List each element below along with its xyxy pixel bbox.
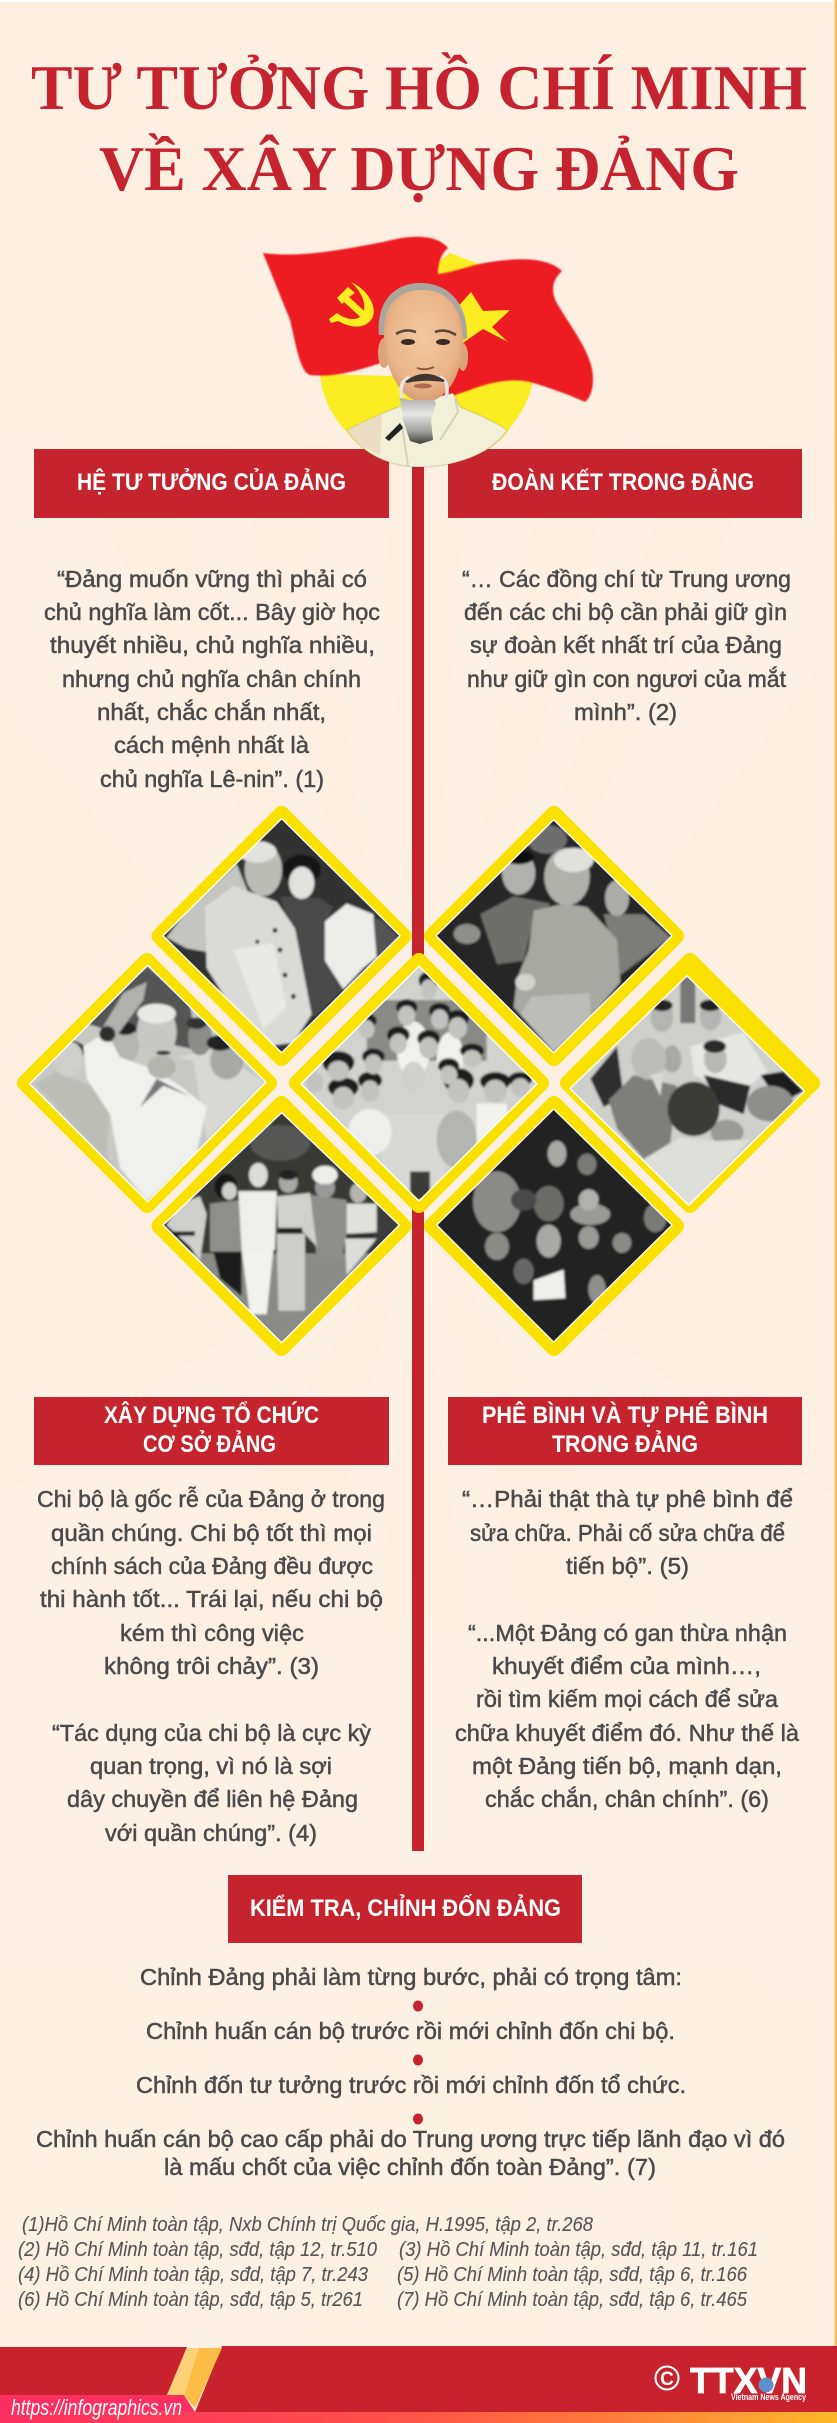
heading: Phê bình và tự phê bình trong Đảng: PHÊ BÌNH VÀ TỰ PHÊ BÌNH	[482, 1401, 768, 1429]
references: (2) Hồ Chí Minh toàn tập, sđd, tập 12, tr.510	[18, 2239, 377, 2261]
logo: TTXVN: Vietnam News Agency	[731, 2392, 806, 2402]
text block: Hệ tư tưởng: chủ nghĩa Lê-nin”. (1)	[100, 766, 324, 792]
text block: Xây dựng tổ chức: dây chuyền để liên hệ Đảng	[67, 1786, 358, 1812]
text block: Kiểm tra, chỉnh đốn: Chỉnh đốn tư tưởng trước rồi mới chỉnh đốn tổ chức.	[136, 2072, 686, 2098]
references: (4) Hồ Chí Minh toàn tập, sđd, tập 7, tr.243	[18, 2264, 368, 2286]
logo: TTXVN: TTXVN	[690, 2360, 807, 2401]
photo: bottom left	[160, 1111, 403, 1346]
text block: Phê bình: một Đảng tiến bộ, mạnh dạn,	[472, 1753, 782, 1779]
photo: middle centre	[300, 964, 540, 1204]
heading: Hệ tư tưởng của Đảng: HỆ TƯ TƯỞNG CỦA ĐẢNG	[77, 467, 346, 496]
photo: bottom right	[434, 1107, 674, 1346]
photo: top right	[434, 818, 674, 1057]
text block: Phê bình: rồi tìm kiếm mọi cách để sửa	[476, 1686, 778, 1712]
references: (1)Hồ Chí Minh toàn tập, Nxb Chính trị Quốc gia, H.1995, tập 2, tr.268	[22, 2214, 593, 2236]
text block: Hệ tư tưởng: nhất, chắc chắn nhất,	[97, 699, 326, 725]
heading: Xây dựng tổ chức cơ sở Đảng	[34, 1397, 389, 1465]
text block: Hệ tư tưởng: thuyết nhiều, chủ nghĩa nhiều,	[50, 632, 375, 658]
text block: Đoàn kết: đến các chi bộ cần phải giữ gìn	[464, 599, 787, 625]
text block: Phê bình: chắc chắn, chân chính”. (6)	[485, 1786, 769, 1812]
icon: star	[455, 292, 510, 345]
heading: Hệ tư tưởng của Đảng	[34, 449, 389, 518]
text block: Đoàn kết	[462, 566, 791, 725]
logo: TTXVN: C	[660, 2369, 674, 2390]
text block: Phê bình: sửa chữa. Phải cố sửa chữa để	[470, 1520, 785, 1546]
text block: Hệ tư tưởng: “Đảng muốn vững thì phải có	[57, 566, 367, 592]
heading: Kiểm tra, chỉnh đốn Đảng: KIỂM TRA, CHỈNH ĐỐN ĐẢNG	[250, 1893, 561, 1922]
url tab: https://infographics.vn	[11, 2395, 182, 2420]
heading: Đoàn kết trong Đảng: ĐOÀN KẾT TRONG ĐẢNG	[492, 467, 754, 496]
text block: Xây dựng tổ chức: “Tác dụng của chi bộ là cực kỳ	[52, 1720, 372, 1746]
references	[18, 2214, 758, 2311]
footer	[0, 2346, 837, 2423]
photo: middle right	[567, 973, 807, 1209]
heading: Xây dựng tổ chức cơ sở Đảng: XÂY DỰNG TỔ CHỨC	[104, 1401, 319, 1429]
text block: Hệ tư tưởng	[44, 566, 380, 792]
heading: Phê bình và tự phê bình trong Đảng	[448, 1397, 802, 1465]
text block: Xây dựng tổ chức: không trôi chảy”. (3)	[104, 1653, 319, 1679]
photo collage	[25, 814, 812, 1348]
central vertical line	[412, 440, 424, 1851]
text block: Hệ tư tưởng: cách mệnh nhất là	[114, 732, 309, 758]
text block: Đoàn kết: “… Các đồng chí từ Trung ương	[462, 566, 791, 592]
text block: Hệ tư tưởng: chủ nghĩa làm cốt... Bây giờ học	[44, 599, 380, 625]
text block: Xây dựng tổ chức: với quần chúng”. (4)	[105, 1820, 317, 1846]
text block: Hệ tư tưởng: nhưng chủ nghĩa chân chính	[62, 666, 361, 692]
heading: Xây dựng tổ chức cơ sở Đảng: CƠ SỞ ĐẢNG	[143, 1429, 276, 1458]
text block: Xây dựng tổ chức: thi hành tốt... Trái lại, nếu chi bộ	[40, 1586, 383, 1612]
text block: Phê bình: chữa khuyết điểm đó. Như thế là	[455, 1720, 799, 1746]
icon: party flag	[263, 237, 593, 402]
text block: Phê bình: “...Một Đảng có gan thừa nhận	[468, 1620, 787, 1646]
icon: hammer and sickle	[329, 282, 374, 327]
text block: Xây dựng tổ chức	[37, 1486, 385, 1846]
text block: Kiểm tra, chỉnh đốn: Chỉnh huấn cán bộ trước rồi mới chỉnh đốn chi bộ.	[146, 2018, 675, 2044]
bullet dot	[413, 2000, 423, 2012]
text block: Xây dựng tổ chức: Chi bộ là gốc rễ của Đảng ở trong	[37, 1486, 385, 1512]
references: (3) Hồ Chí Minh toàn tập, sđd, tập 11, tr.161	[399, 2239, 758, 2261]
text block: Xây dựng tổ chức: quần chúng. Chi bộ tốt thì mọi	[51, 1520, 372, 1546]
text block: Đoàn kết: mình”. (2)	[574, 699, 677, 725]
heading: Phê bình và tự phê bình trong Đảng: TRONG ĐẢNG	[552, 1429, 698, 1458]
text block: Phê bình: tiến bộ”. (5)	[566, 1553, 689, 1579]
icon: yellow flag backing	[320, 253, 533, 467]
text block: Xây dựng tổ chức: chính sách của Đảng đều được	[51, 1553, 373, 1579]
yellow diamond frames	[25, 814, 812, 1348]
photo: top left	[160, 814, 403, 1057]
text block: Kiểm tra, chỉnh đốn: Chỉnh huấn cán bộ cao cấp phải do Trung ương trực tiếp lãnh đạo vì đó	[36, 2126, 785, 2152]
photo: middle left	[27, 962, 270, 1205]
flag and portrait	[263, 237, 593, 467]
text block: Kiểm tra, chỉnh đốn: là mấu chốt của việc chỉnh đốn toàn Đảng”. (7)	[164, 2154, 656, 2180]
text block: Phê bình: “…Phải thật thà tự phê bình để	[462, 1486, 793, 1512]
portrait	[347, 283, 507, 467]
title: TƯ TƯỞNG HỒ CHÍ MINH	[31, 52, 807, 123]
references: (6) Hồ Chí Minh toàn tập, sđd, tập 5, tr261	[18, 2289, 363, 2311]
text block: Xây dựng tổ chức: quan trọng, vì nó là sợi	[90, 1753, 332, 1779]
heading: Kiểm tra, chỉnh đốn Đảng	[228, 1875, 582, 1943]
text block: Kiểm tra, chỉnh đốn	[36, 1964, 785, 2180]
references: (5) Hồ Chí Minh toàn tập, sđd, tập 6, tr.166	[397, 2264, 748, 2286]
heading: Đoàn kết trong Đảng	[448, 449, 802, 518]
text block: Phê bình	[455, 1486, 799, 1812]
text block: Xây dựng tổ chức: kém thì công việc	[120, 1620, 304, 1646]
bullet dot	[413, 2054, 423, 2066]
references: (7) Hồ Chí Minh toàn tập, sđd, tập 6, tr.465	[397, 2289, 748, 2311]
bullet dot	[413, 2114, 423, 2124]
text block: Đoàn kết: như giữ gìn con ngươi của mắt	[467, 666, 787, 692]
title	[31, 52, 807, 204]
text block: Đoàn kết: sự đoàn kết nhất trí của Đảng	[470, 632, 782, 658]
title: VỀ XÂY DỰNG ĐẢNG	[99, 133, 739, 204]
text block: Phê bình: khuyết điểm của mình…,	[492, 1653, 761, 1679]
text block: Kiểm tra, chỉnh đốn: Chỉnh Đảng phải làm từng bước, phải có trọng tâm:	[140, 1964, 682, 1990]
